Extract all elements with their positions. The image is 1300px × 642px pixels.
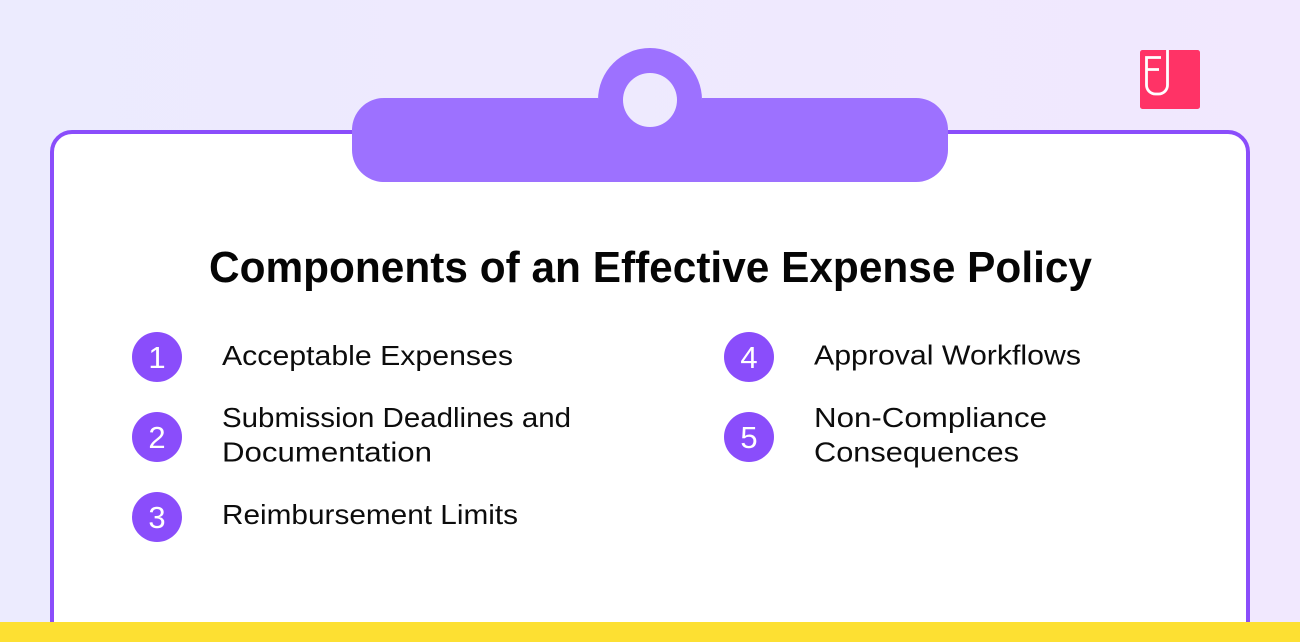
- number badge 3: 3: [148, 500, 166, 535]
- label: submission deadlines and documentation: Submission Deadlines and: [222, 402, 571, 433]
- number badge 5: 5: [740, 420, 758, 455]
- icon: brand logo: [1140, 50, 1200, 109]
- list item 1: [132, 332, 513, 382]
- list item 5: [724, 402, 1047, 468]
- number badge 2: [132, 412, 182, 462]
- label: acceptable expenses: Acceptable Expenses: [222, 340, 513, 371]
- list item 3: [132, 492, 518, 542]
- label: submission deadlines and documentation: [222, 402, 571, 468]
- number badge 3: [132, 492, 182, 542]
- footer bar: [0, 622, 1300, 642]
- icon: clipboard clip: [352, 48, 948, 182]
- panel: clipboard sheet: [52, 132, 1248, 642]
- label: submission deadlines and documentation: Documentation: [222, 436, 432, 468]
- label: non-compliance consequences: [814, 402, 1047, 468]
- number badge 4: 4: [740, 340, 758, 375]
- label: reimbursement limits: Reimbursement Limits: [222, 499, 518, 530]
- number badge 1: [132, 332, 182, 382]
- number badge 2: 2: [148, 420, 166, 455]
- label: non-compliance consequences: Consequences: [814, 436, 1019, 468]
- number badge 1: 1: [148, 340, 166, 375]
- label: approval workflows: Approval Workflows: [814, 340, 1081, 370]
- number badge 4: [724, 332, 774, 382]
- number badge 5: [724, 412, 774, 462]
- list item 2: [132, 402, 571, 468]
- title: Components of an Effective Expense Policy: [209, 243, 1093, 292]
- label: non-compliance consequences: Non-Compliance: [814, 402, 1047, 433]
- list item 4: [724, 332, 1081, 382]
